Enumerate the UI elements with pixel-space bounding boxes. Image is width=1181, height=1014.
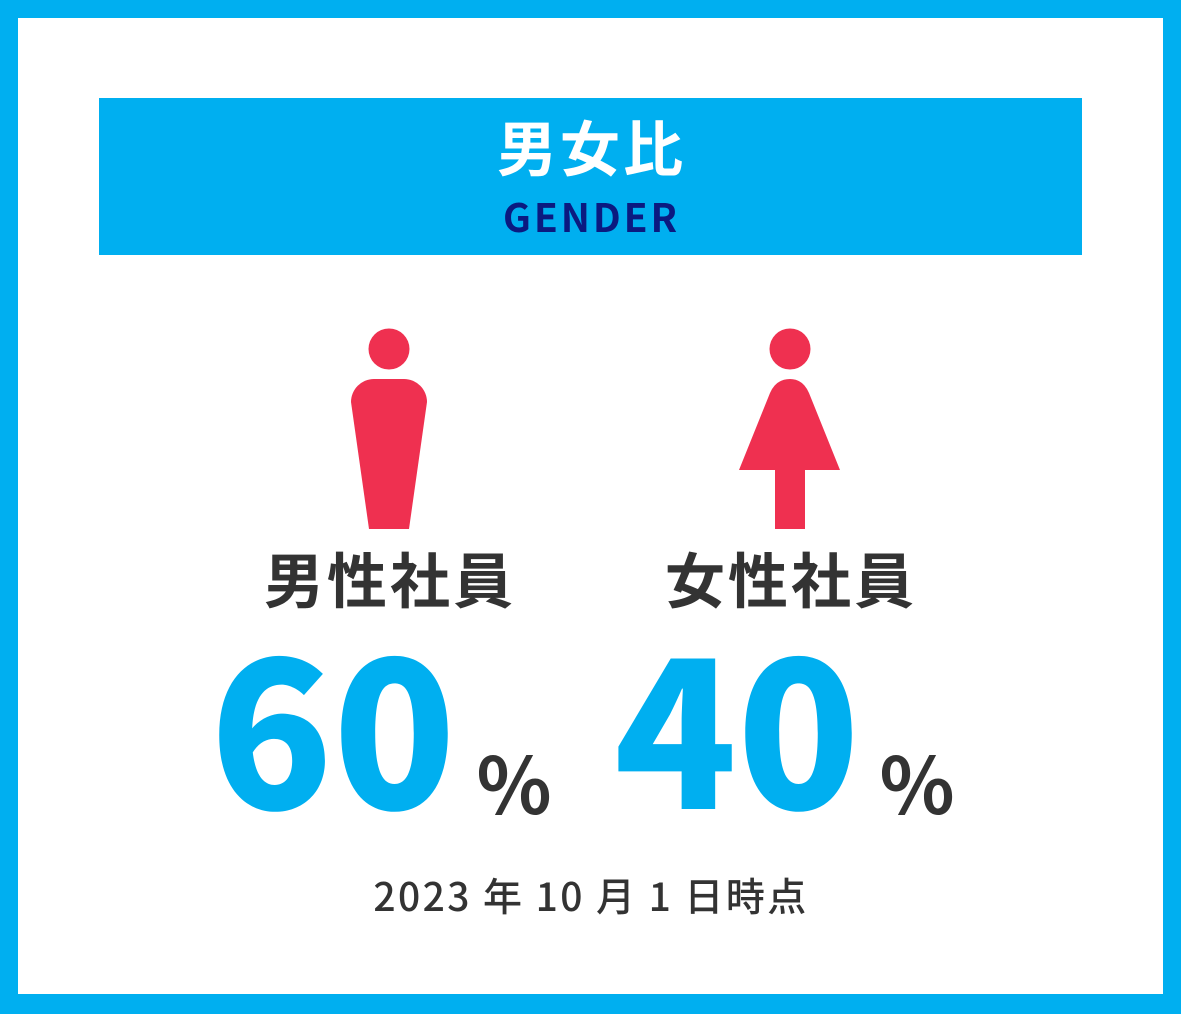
male percentage: 60 — [210, 576, 456, 868]
female label: 女性社員 — [665, 534, 917, 621]
title: 男女比 — [497, 102, 686, 189]
date note: 2023 年 10 月 1 日時点 — [373, 867, 809, 923]
female percentage: 40 — [614, 576, 860, 868]
male label: 男性社員 — [264, 534, 516, 621]
icon: female figure — [739, 328, 840, 529]
female percent sign: % — [879, 725, 955, 837]
male percent sign: % — [476, 725, 552, 837]
subtitle: GENDER — [503, 188, 680, 244]
icon: male figure — [351, 328, 427, 529]
header banner — [99, 98, 1082, 255]
